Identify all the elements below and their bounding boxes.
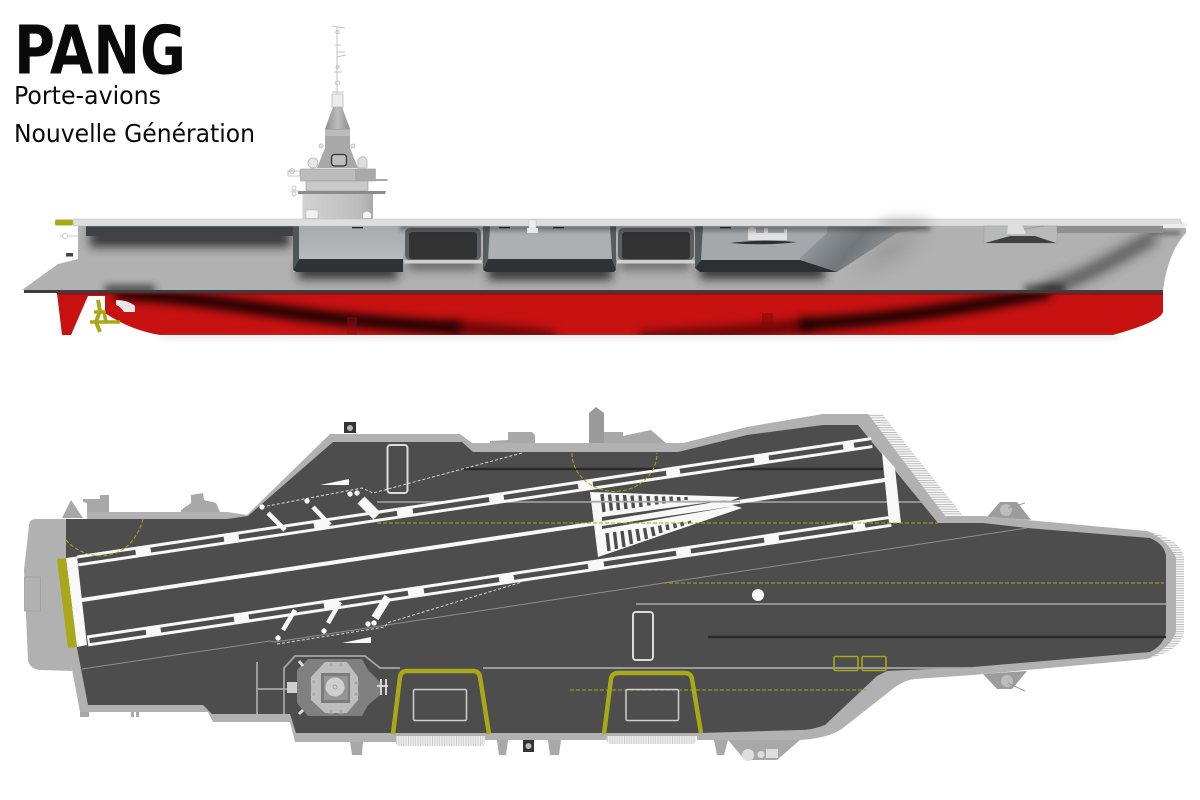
sponson 1 [293, 226, 403, 272]
sponson 2 face [483, 226, 616, 272]
ramp shadow over deck [877, 218, 933, 228]
faint shadow under hull [160, 336, 1120, 339]
island base [302, 194, 373, 219]
sponson 1 face [293, 226, 403, 272]
wing lower [298, 191, 386, 194]
lower runway [87, 516, 893, 646]
elevator hatch 2 [607, 733, 696, 744]
stern small block [80, 712, 89, 717]
lower wedge [602, 506, 735, 529]
sponson 2 [483, 226, 616, 272]
elevator 2 rectangle [626, 690, 678, 720]
bottom mooring square [523, 740, 534, 752]
sponson 3 left face [695, 226, 827, 268]
arch door [363, 212, 371, 218]
square hole [347, 425, 353, 431]
davit details [290, 186, 300, 196]
opening 2 interior [622, 232, 690, 259]
flight deck surface [66, 425, 1166, 733]
angled edge hatch [868, 414, 963, 516]
bow strip [1057, 226, 1163, 233]
subtitle line 2: Nouvelle Génération [14, 119, 255, 148]
pod rect [766, 749, 778, 758]
lower strut 4 [714, 740, 728, 755]
ramp face [800, 226, 928, 272]
elevator 1 rectangle [414, 690, 466, 720]
sponson 1 left side [293, 226, 299, 270]
title [14, 12, 255, 148]
white dashed catapult limits [262, 453, 522, 644]
top view of the carrier [24, 407, 1184, 761]
stern details [60, 234, 78, 256]
upper runway [77, 437, 873, 566]
gun sponson bottom [983, 671, 1027, 691]
lower starboard pod [728, 740, 800, 761]
gun sponson dark [985, 236, 1056, 243]
lower elevators hatching [396, 733, 696, 746]
red hull top shade [57, 293, 1163, 295]
stern gallery [86, 226, 293, 236]
fixture on sponson [748, 227, 787, 240]
upper wedge [602, 500, 730, 521]
turret [1001, 675, 1013, 687]
propeller [90, 300, 120, 332]
red underwater hull [57, 293, 1163, 335]
yellow dashed guide lines [66, 453, 1164, 690]
deck spots [259, 490, 764, 641]
sponson [983, 671, 1027, 689]
gun sponson top [987, 502, 1031, 520]
side fixtures [62, 407, 728, 755]
hull shadows [90, 230, 1180, 292]
tower band [325, 130, 350, 136]
lower strut 2 [548, 740, 561, 755]
deck dark lines [462, 469, 1166, 637]
mount wedge [623, 430, 667, 444]
opening 2 sill [617, 260, 695, 264]
port mount [83, 495, 109, 512]
sponson 1 lower [293, 259, 403, 272]
port mount 2 [181, 493, 220, 512]
platform right panel [355, 170, 375, 180]
radar domes [288, 144, 367, 176]
hangar opening 2 [617, 228, 695, 264]
shadow along deck underside [400, 224, 930, 231]
elevator 1 outline [393, 671, 489, 734]
island outer octagon [311, 662, 358, 713]
mast mount [589, 407, 604, 444]
island H symbol [377, 679, 388, 695]
sponson 3 side [695, 226, 703, 268]
upper hatches [602, 494, 686, 512]
hangar opening 1 [404, 228, 482, 264]
mount top [490, 432, 535, 444]
island inner light [324, 676, 348, 700]
sponson 2 sides [483, 226, 616, 270]
island superstructure [288, 26, 388, 219]
deck grey lines [82, 502, 1166, 669]
stern yellow band [57, 558, 77, 648]
hatched bow edge [868, 414, 1184, 659]
wing upper [375, 179, 388, 181]
fixture base [527, 228, 538, 233]
lower hatches [607, 521, 690, 551]
square [344, 422, 356, 433]
chevron markings [590, 492, 742, 557]
sponson 3 with ramp [695, 226, 928, 272]
island plan [257, 656, 400, 716]
pod small circle [758, 751, 764, 758]
opening 2 frame [618, 228, 694, 260]
catapult blast bars [268, 500, 388, 630]
stern yellow tip [55, 220, 73, 226]
small deck fixture [527, 220, 538, 233]
waterline stripe [24, 290, 1163, 293]
elevator 2 [604, 673, 701, 734]
elevator 1 [393, 671, 489, 734]
hull dark bands [115, 291, 1050, 338]
island deck [297, 659, 380, 716]
stern platform body [24, 519, 72, 671]
pod circle [742, 749, 754, 761]
grey hull side [22, 226, 1186, 290]
outlined deck rectangles [388, 445, 653, 660]
sponson 3 lower [695, 260, 837, 272]
mount block [604, 432, 623, 444]
heading: PANG: PANG [14, 12, 186, 90]
lower strut 3 [350, 741, 363, 755]
opening 1 frame [405, 228, 481, 260]
mid block [306, 181, 368, 191]
deck centre line [82, 480, 885, 600]
island inner octagon [321, 673, 350, 703]
fixture shadow [730, 241, 797, 244]
port tip [62, 500, 83, 518]
forward gun sponson [984, 225, 1057, 244]
bow white threshold [882, 453, 901, 523]
upper runway slots [77, 440, 872, 563]
gun sponson body [984, 226, 1057, 244]
door [306, 210, 318, 218]
upper runway band [77, 437, 873, 566]
island enclosure lines [257, 656, 400, 714]
sponson 2 lower [483, 259, 616, 272]
elevator 2 outline [604, 673, 701, 734]
upper platform [300, 169, 376, 181]
stern platform [24, 519, 72, 671]
gun [1007, 225, 1026, 234]
opening 1 interior [409, 232, 477, 259]
deck outer rim [57, 414, 1184, 742]
island dome [326, 678, 344, 696]
barrel [1008, 503, 1025, 508]
bridge window [332, 154, 346, 166]
sponson [987, 502, 1031, 520]
top mooring square [344, 422, 356, 433]
stern struts [131, 712, 139, 717]
square [523, 740, 534, 752]
side view of the carrier [22, 26, 1186, 339]
lower runway slots [89, 519, 892, 643]
stern light [60, 235, 78, 237]
stern ring [62, 234, 68, 238]
tower [317, 129, 358, 168]
yellow bow boxes [834, 656, 886, 670]
bow plate [1163, 224, 1186, 228]
mast [332, 26, 346, 94]
fixture post [529, 220, 536, 228]
elevator hatch 1 [396, 733, 485, 746]
subtitle line 1: Porte-avions [14, 81, 161, 110]
island dome centre [333, 685, 337, 689]
rudder notch opening [116, 300, 135, 312]
bow edge hatch [1147, 531, 1184, 659]
lower strut 1 [497, 740, 508, 755]
stern white threshold [66, 556, 87, 647]
pod body [728, 740, 800, 760]
island diagonals [299, 661, 303, 714]
deck-edge dark marks [352, 227, 731, 228]
island side block [287, 682, 297, 693]
white wedges [320, 479, 371, 643]
gun barrel [1024, 226, 1044, 229]
opening 1 sill [404, 260, 482, 264]
funnel cap [332, 94, 343, 107]
barrel [1008, 683, 1025, 691]
grey line over chevron [590, 501, 740, 503]
chevron white fill [590, 492, 742, 557]
square hole [526, 743, 532, 749]
lower runway band [87, 516, 892, 646]
turret [1000, 504, 1012, 516]
island squares [312, 663, 358, 713]
upper cone [325, 107, 350, 129]
stern panel [24, 577, 40, 611]
flight deck edge [73, 219, 1186, 226]
stern slot [66, 253, 73, 256]
